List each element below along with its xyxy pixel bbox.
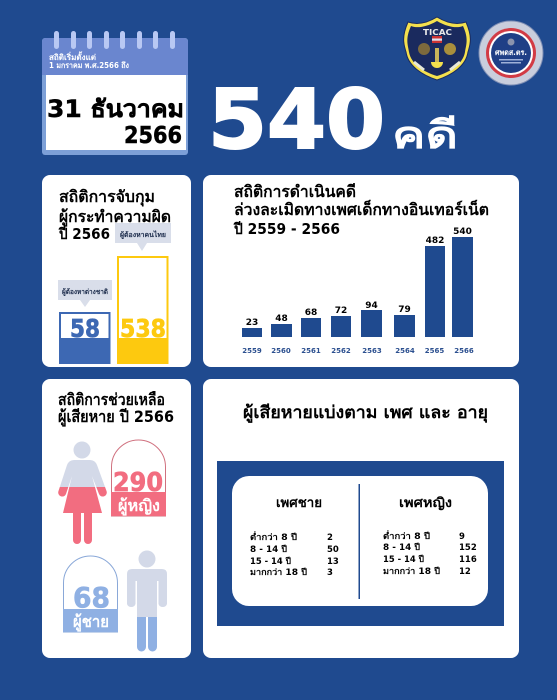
bar chart: 94 xyxy=(365,301,378,311)
logo: TICAC shield xyxy=(404,17,470,80)
icon: man xyxy=(127,550,167,652)
headline: 540 cases xyxy=(208,73,458,168)
heading: arrest statistics: ผู้กระทำความผิด xyxy=(59,207,171,228)
callout: foreign suspects xyxy=(58,280,112,307)
table: female victims: 8 - 14 ปี xyxy=(383,542,421,553)
table: male victims: 13 xyxy=(327,557,339,567)
callout: foreign suspects: ผู้ต้องหาต่างชาติ xyxy=(62,287,108,297)
table: male victims: มากกว่า 18 ปี xyxy=(250,567,308,578)
logo: police unit seal: ศพดส.ตร. xyxy=(495,48,527,57)
table card xyxy=(232,476,488,606)
bar chart: 540 xyxy=(453,227,472,237)
heading: victim assistance: สถิติการช่วยเหลือ xyxy=(58,390,165,409)
bar chart: 2560 xyxy=(271,347,291,355)
panel: arrest statistics xyxy=(42,175,191,367)
heading: arrest statistics: สถิติการจับกุม xyxy=(59,187,155,207)
table: female victims: เพศหญิง xyxy=(399,496,452,511)
table: female victims: 9 xyxy=(459,532,465,542)
bar chart: 2563 xyxy=(362,347,382,355)
heading: case statistics: สถิติการดำเนินคดี xyxy=(234,182,356,201)
heading: case statistics: ล่วงละเมิดทางเพศเด็กทางอินเทอร์เน็ต xyxy=(234,198,489,219)
table frame xyxy=(217,461,504,626)
heading: victims by gender and age: ผู้เสียหายแบ่งตาม เพศ และ อายุ xyxy=(243,402,488,424)
callout: Thai suspects xyxy=(115,223,171,251)
bar chart: 48 xyxy=(275,314,288,324)
bar chart: 23 xyxy=(246,318,258,328)
callout: Thai suspects: ผู้ต้องหาคนไทย xyxy=(120,230,166,240)
bar: 538 Thai suspects: 538 xyxy=(120,314,166,343)
bar chart: 79 xyxy=(398,305,411,315)
table: male victims: 15 - 14 ปี xyxy=(250,556,292,567)
bar chart: 482 xyxy=(426,236,444,246)
table: female victims: 116 xyxy=(459,555,477,565)
bar chart: 72 xyxy=(335,306,347,316)
heading: case statistics: ปี 2559 - 2566 xyxy=(233,220,340,238)
heading: victim assistance: ผู้เสียหาย ปี 2566 xyxy=(58,407,174,428)
table: male victims: ต่ำกว่า 8 ปี xyxy=(250,530,298,543)
bar: 58 foreign suspects xyxy=(59,313,110,364)
heading: arrest statistics xyxy=(58,187,171,243)
bar chart: 68 xyxy=(305,308,317,318)
table: male victims: เพศชาย xyxy=(276,496,322,511)
bar chart: 2565 xyxy=(425,347,444,355)
headline: 540 cases: คดี xyxy=(392,113,458,157)
table: female victims xyxy=(383,496,477,577)
table: male victims xyxy=(250,496,339,578)
badge: 290 women xyxy=(111,440,166,517)
calendar: 1 มกราคม พ.ศ.2566 ถึง xyxy=(49,61,129,70)
table: female victims: 152 xyxy=(459,543,477,553)
logo: TICAC shield: TICAC xyxy=(423,28,452,37)
table: male victims: 3 xyxy=(327,568,333,578)
bar chart: 2566 xyxy=(454,347,474,355)
heading: case statistics xyxy=(233,182,489,238)
bar chart: 2561 xyxy=(301,347,321,355)
heading: arrest statistics: ปี 2566 xyxy=(58,225,110,243)
calendar xyxy=(42,31,188,155)
calendar: สถิติเริ่มตั้งแต่ xyxy=(49,51,96,62)
table: female victims: ต่ำกว่า 8 ปี xyxy=(383,529,431,542)
divider xyxy=(358,484,360,599)
table: female victims: 15 - 14 ปี xyxy=(383,554,425,565)
bar chart: 2559 xyxy=(242,347,262,355)
table: female victims: 12 xyxy=(459,567,471,577)
badge: 68 men xyxy=(63,556,118,633)
heading: victim assistance xyxy=(58,390,174,428)
table: female victims: มากกว่า 18 ปี xyxy=(383,566,441,577)
badge: 68 men: ผู้ชาย xyxy=(73,612,109,633)
logo: police unit seal xyxy=(479,21,543,85)
bar: 538 Thai suspects xyxy=(117,257,168,364)
table: male victims: 8 - 14 ปี xyxy=(250,544,288,555)
headline: 540 cases: 540 xyxy=(208,73,385,168)
badge: 290 women: 290 xyxy=(113,468,163,498)
panel: victim assistance xyxy=(42,379,191,658)
panel: victims by gender and age xyxy=(203,379,519,658)
icon: woman xyxy=(58,442,107,544)
panel: case statistics bar chart xyxy=(203,175,519,367)
badge: 68 men: 68 xyxy=(73,581,110,614)
table: male victims: 50 xyxy=(327,545,339,555)
bar chart: 2562 xyxy=(331,347,351,355)
bar chart xyxy=(242,227,474,355)
calendar: 2566 xyxy=(124,123,182,149)
badge: 290 women: ผู้หญิง xyxy=(118,496,160,517)
table: male victims: 2 xyxy=(327,533,333,543)
bar: 58 foreign suspects: 58 xyxy=(70,314,100,343)
bar chart: 2564 xyxy=(395,347,415,355)
calendar: 31 ธันวาคม xyxy=(47,95,184,123)
